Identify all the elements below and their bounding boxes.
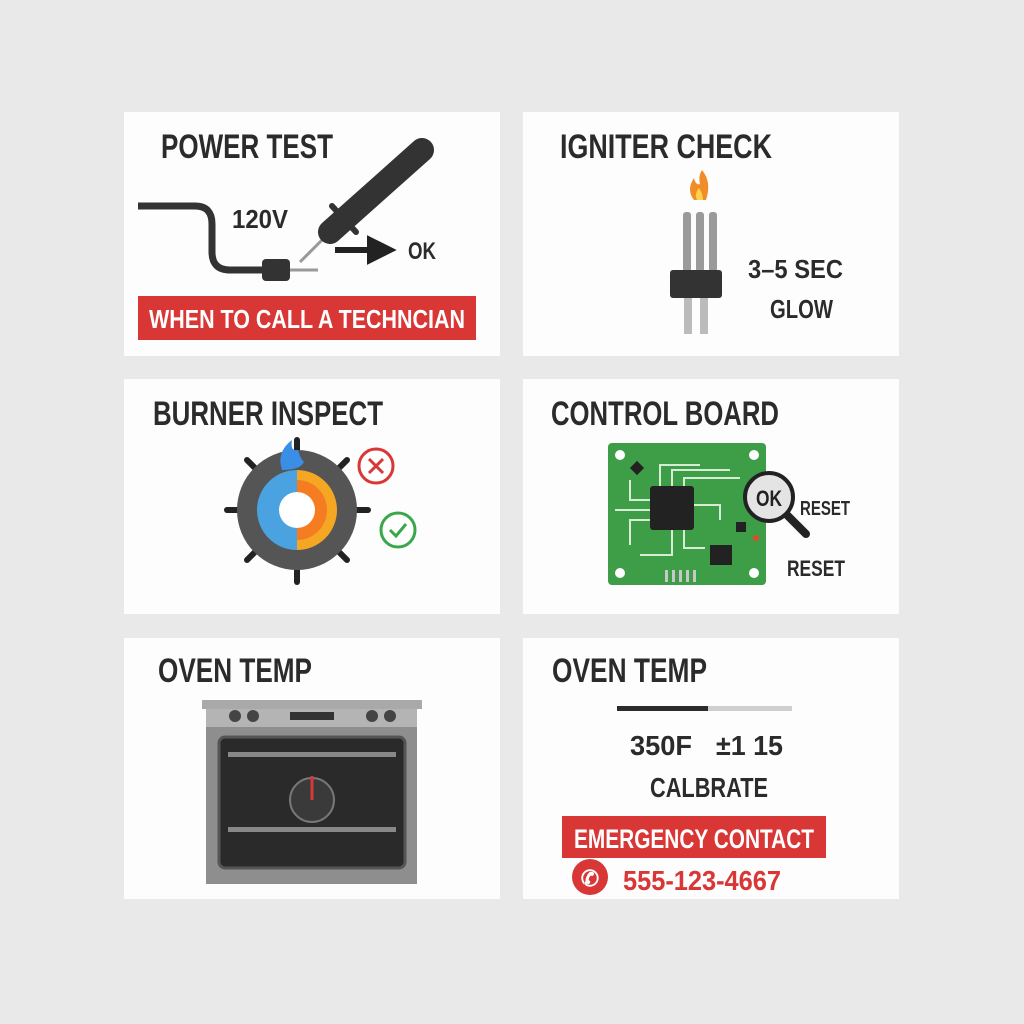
label: 3-5 sec glow bbox=[748, 254, 843, 324]
banner: emergency contact: EMERGENCY CONTACT bbox=[574, 824, 814, 854]
label: 3-5 sec glow: 3–5 SEC bbox=[748, 254, 843, 284]
panel: control board bbox=[523, 379, 899, 614]
icon: cable and plug bbox=[138, 206, 318, 281]
icon: burner bbox=[227, 440, 368, 582]
panel: power test bbox=[124, 112, 500, 356]
label: 120V: 120V bbox=[232, 204, 289, 234]
heading: power test: POWER TEST bbox=[161, 128, 333, 166]
banner: when to call a technician: WHEN TO CALL A TECHNCIAN bbox=[149, 304, 465, 334]
heading: oven temp: OVEN TEMP bbox=[552, 652, 707, 690]
icon: igniter bbox=[670, 170, 722, 334]
heading: burner inspect: BURNER INSPECT bbox=[153, 395, 383, 433]
icon: phone: ✆ bbox=[581, 866, 599, 891]
icon: oven bbox=[202, 700, 422, 884]
label: OK: OK bbox=[408, 238, 437, 265]
icon: magnifier OK: OK bbox=[756, 486, 782, 511]
text: 350F ±1 15: 350F bbox=[630, 730, 692, 761]
heading: control board: CONTROL BOARD bbox=[551, 395, 779, 433]
text: 350F ±1 15: ±1 15 bbox=[716, 730, 783, 761]
icon: green check bbox=[381, 513, 415, 547]
icon: voltage probe bbox=[300, 150, 422, 262]
arrow bbox=[335, 240, 390, 260]
text: calbrate: CALBRATE bbox=[650, 772, 768, 803]
panel: oven temp right bbox=[523, 638, 899, 899]
panel: oven temp left bbox=[124, 638, 500, 899]
panel: igniter check bbox=[523, 112, 899, 356]
heading: igniter check: IGNITER CHECK bbox=[560, 128, 772, 166]
banner: when to call a technician bbox=[138, 296, 476, 340]
heading: oven temp: OVEN TEMP bbox=[158, 652, 312, 690]
label: reset: RESET bbox=[787, 556, 845, 581]
panel: burner inspect bbox=[124, 379, 500, 614]
text: 350F ±1 15 bbox=[630, 730, 783, 761]
label: reset: RESET bbox=[800, 498, 850, 520]
icon: red x bbox=[359, 449, 393, 483]
icon: circuit board bbox=[608, 443, 766, 585]
gauge bar bbox=[617, 706, 792, 711]
icon: phone bbox=[572, 859, 608, 895]
label: reset bbox=[787, 498, 850, 581]
icon: magnifier OK bbox=[745, 473, 806, 534]
banner: emergency contact bbox=[562, 816, 826, 858]
label: 3-5 sec glow: GLOW bbox=[770, 294, 833, 324]
text: phone number: 555-123-4667 bbox=[623, 865, 781, 896]
